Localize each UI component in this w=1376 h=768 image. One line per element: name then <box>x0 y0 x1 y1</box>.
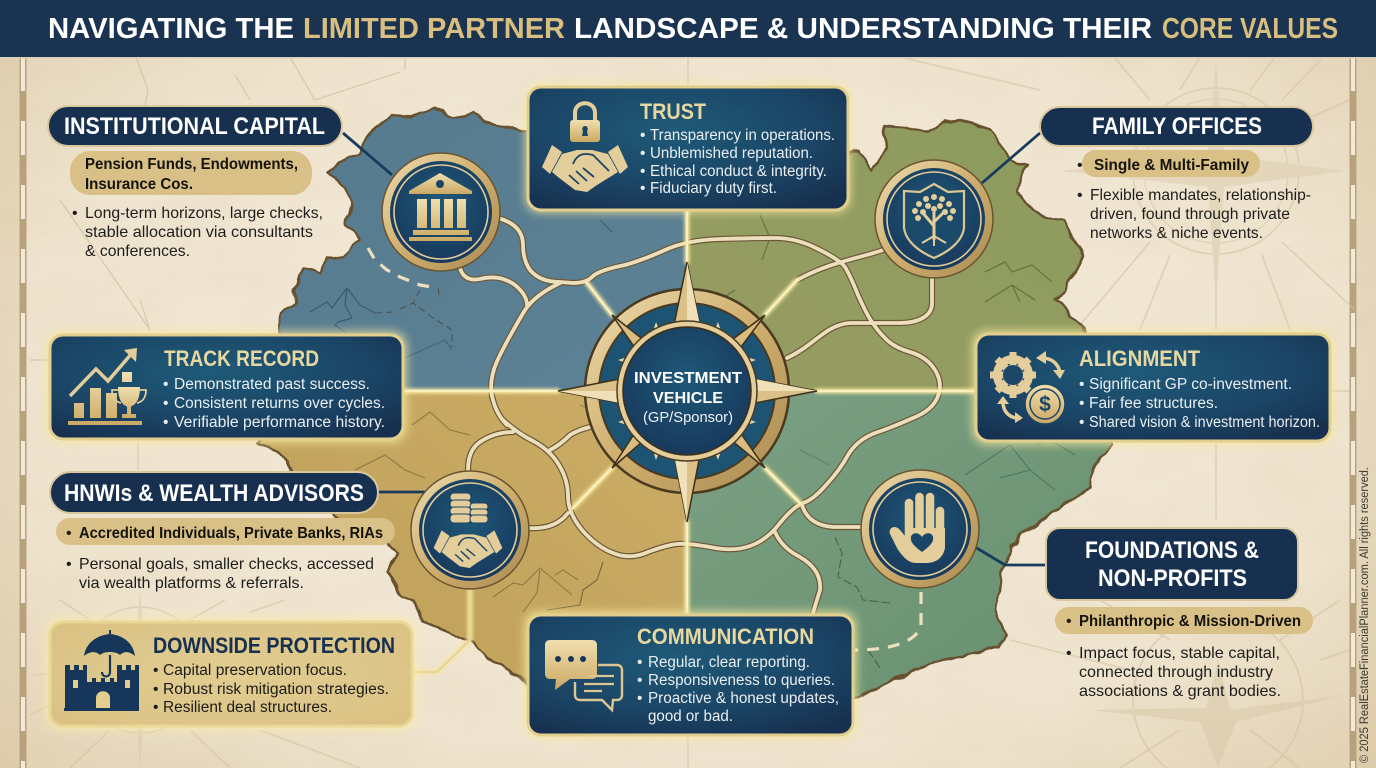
compass rose: bottom right <box>1010 600 1350 768</box>
panel: HNWIs and wealth advisors: via wealth platforms & referrals. <box>79 575 304 592</box>
panel: institutional capital: INSTITUTIONAL CAPITAL <box>64 113 325 140</box>
panel: institutional capital: • <box>72 205 78 222</box>
territory: HNWI tan <box>259 392 686 680</box>
panel: track record: • <box>163 414 168 431</box>
panel: communication: Responsiveness to queries. <box>648 672 835 689</box>
investor type tag: Single & Multi-Family <box>1094 157 1249 174</box>
panel: alignment: • <box>1079 376 1084 393</box>
title banner: LIMITED PARTNER <box>303 13 565 45</box>
panel: trust: • <box>640 145 645 162</box>
investor type tag: Accredited Individuals, Private Banks, RIAs <box>79 525 383 542</box>
panel: foundations and non-profits: NON-PROFITS <box>1098 565 1247 592</box>
mountains and cracks <box>310 215 1075 668</box>
panel: HNWIs and wealth advisors <box>50 472 395 592</box>
icon: gear, coin and arrows <box>990 351 1065 424</box>
investor type tag: Pension Funds, Endowments, <box>85 156 298 173</box>
panel: alignment: ALIGNMENT <box>1079 346 1201 371</box>
badge: family shield and tree <box>875 160 993 278</box>
investor type tag <box>70 151 312 195</box>
territory: foundations green <box>688 392 1111 697</box>
panel: HNWIs and wealth advisors: • <box>66 556 72 573</box>
center label: INVESTMENT <box>634 370 742 387</box>
panel: family offices <box>1040 107 1313 242</box>
icon: gear, coin and arrows: $ <box>1039 393 1051 416</box>
panel: track record: Verifiable performance history. <box>174 414 385 431</box>
icon: lock and handshake <box>542 103 628 192</box>
title banner: LANDSCAPE & UNDERSTANDING THEIR <box>574 13 1152 45</box>
panel: track record: • <box>163 395 168 412</box>
panel: institutional capital: & conferences. <box>85 243 190 260</box>
panel: family offices: networks & niche events. <box>1090 225 1263 242</box>
investor type tag: Philanthropic & Mission-Driven <box>1079 613 1301 630</box>
center label: (GP/Sponsor) <box>643 410 733 426</box>
panel: communication: • <box>637 690 642 707</box>
territory: institutional blue <box>280 110 686 390</box>
panel: family offices: FAMILY OFFICES <box>1092 113 1262 140</box>
panel: downside protection <box>47 619 415 729</box>
panel: downside protection: • <box>153 699 158 716</box>
leader lines <box>343 133 1047 565</box>
panel: trust: • <box>640 127 645 144</box>
panel: trust: TRUST <box>640 99 707 124</box>
panel: alignment: • <box>1079 395 1084 412</box>
panel: trust: Transparency in operations. <box>650 127 835 144</box>
panel: track record: Demonstrated past success. <box>174 376 370 393</box>
panel: track record: TRACK RECORD <box>164 346 319 371</box>
investor type tag: Insurance Cos. <box>85 176 193 193</box>
panel: foundations and non-profits: • <box>1066 645 1072 662</box>
center label: VEHICLE <box>653 390 723 407</box>
panel: trust: Ethical conduct & integrity. <box>650 163 827 180</box>
panel: track record <box>47 332 406 442</box>
panel: alignment: • <box>1079 414 1084 431</box>
panel: communication: Regular, clear reporting. <box>648 654 810 671</box>
central compass: investment vehicle <box>558 262 817 522</box>
panel: foundations and non-profits: associations & grant bodies. <box>1079 683 1281 700</box>
investor type tag <box>56 518 395 545</box>
panel: foundations and non-profits: Impact focus, stable capital, <box>1079 645 1280 662</box>
panel: communication: Proactive & honest updates, <box>648 690 839 707</box>
panel: communication: good or bad. <box>648 708 733 725</box>
compass rose: top right <box>900 40 1355 330</box>
badge: coins and handshake <box>411 471 529 589</box>
title banner <box>0 0 1376 58</box>
panel: downside protection: • <box>153 681 158 698</box>
compass rose: bottom left <box>30 592 360 768</box>
panel: trust: Unblemished reputation. <box>650 145 813 162</box>
panel: alignment: Fair fee structures. <box>1089 395 1218 412</box>
panel: institutional capital: Long-term horizons, large checks, <box>85 205 323 222</box>
panel: downside protection: Resilient deal structures. <box>163 699 332 716</box>
investor type tag <box>1055 607 1313 634</box>
panel: foundations and non-profits <box>1046 528 1313 700</box>
map of LP territories <box>256 106 1114 700</box>
title banner: CORE VALUES <box>1162 13 1338 45</box>
panel: alignment: Significant GP co-investment. <box>1089 376 1292 393</box>
panel: HNWIs and wealth advisors: HNWIs & WEALTH ADVISORS <box>64 480 364 507</box>
panel: trust <box>526 85 850 212</box>
center label <box>634 370 742 426</box>
panel: downside protection: Robust risk mitigation strategies. <box>163 681 389 698</box>
panel: downside protection: • <box>153 662 158 679</box>
investor type tag <box>1077 150 1260 177</box>
icon: chat bubbles <box>545 640 622 710</box>
panel: institutional capital: stable allocation via consultants <box>85 224 313 241</box>
panel: family offices: • <box>1077 187 1083 204</box>
badge: hand with heart <box>861 470 979 588</box>
icon: castle and umbrella <box>64 630 139 711</box>
investor type tag: • <box>1066 613 1072 630</box>
panel: communication: • <box>637 654 642 671</box>
panel: family offices: driven, found through private <box>1090 206 1290 223</box>
panel: HNWIs and wealth advisors: Personal goals, smaller checks, accessed <box>79 556 374 573</box>
panel: institutional capital <box>48 106 342 260</box>
panel: alignment <box>973 331 1333 444</box>
icon: chart and trophy <box>68 348 146 425</box>
roads network <box>368 218 940 650</box>
panel: communication <box>525 612 856 738</box>
panel: track record: • <box>163 376 168 393</box>
panel: trust: • <box>640 163 645 180</box>
investor type tag: • <box>1077 157 1083 174</box>
glowing connection lines <box>403 210 976 672</box>
panel: communication: COMMUNICATION <box>637 624 814 649</box>
badge: institutional bank <box>382 153 500 271</box>
panel: foundations and non-profits: FOUNDATIONS & <box>1085 537 1259 564</box>
panel: family offices: Flexible mandates, relationship- <box>1090 187 1311 204</box>
panel: downside protection: Capital preservation focus. <box>163 662 347 679</box>
panel: track record: Consistent returns over cycles. <box>174 395 385 412</box>
investor type tag: • <box>66 525 72 542</box>
panel: foundations and non-profits: connected through industry <box>1079 664 1273 681</box>
panel: trust: Fiduciary duty first. <box>650 180 777 197</box>
panel: communication: • <box>637 672 642 689</box>
panel: trust: • <box>640 180 645 197</box>
title banner: NAVIGATING THE <box>48 13 294 45</box>
territory: family offices olive <box>688 121 1083 390</box>
panel: downside protection: DOWNSIDE PROTECTION <box>153 633 395 658</box>
panel: alignment: Shared vision & investment horizon. <box>1089 414 1320 431</box>
copyright note: © 2025 RealEstateFinancialPlanner.com. All rights reserved. <box>1359 467 1371 763</box>
